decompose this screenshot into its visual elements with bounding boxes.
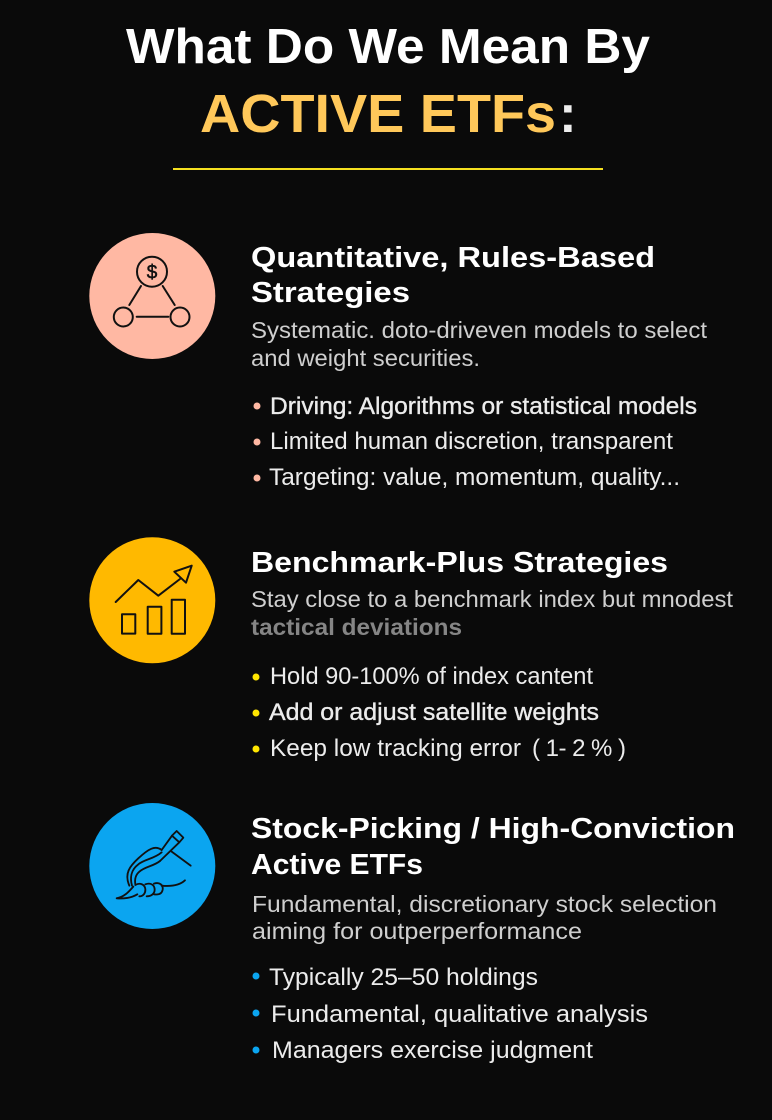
description: aiming for outperperformance: [252, 918, 582, 944]
bullet list: [252, 964, 648, 1064]
heading: [251, 813, 735, 881]
description: [252, 891, 717, 944]
bullet list: ( 1- 2 % ): [532, 735, 626, 762]
description: [251, 317, 708, 371]
description: Fundamental, discretionary stock selection: [252, 891, 717, 917]
description: Systematic. doto-driveven models to select: [251, 317, 708, 343]
bullet list: [254, 393, 697, 491]
heading: Quantitative, Rules-Based: [251, 242, 655, 274]
heading: Stock-Picking / High-Conviction: [251, 813, 735, 845]
title: What Do We Mean By: [126, 20, 650, 74]
heading: Active ETFs: [251, 849, 423, 881]
title: [126, 20, 650, 144]
heading: [251, 242, 655, 309]
bullet list: Hold 90-100% of index cantent: [270, 663, 593, 690]
heading: Benchmark-Plus Strategies: [251, 547, 668, 579]
panel: benchmark-plus strategies: [89, 537, 734, 762]
title: ACTIVE ETFs: [200, 84, 556, 144]
icon: network with dollar: $: [147, 262, 158, 284]
heading: Strategies: [251, 277, 410, 309]
bullet list: Limited human discretion, transparent: [270, 428, 673, 455]
bullet list: Driving: Algorithms or statistical models: [270, 393, 697, 420]
icon: growth chart: [89, 537, 215, 663]
bullet list: [252, 663, 626, 762]
description: and weight securities.: [251, 345, 480, 371]
bullet list: Add or adjust satellite weights: [269, 699, 599, 726]
bullet list: Managers exercise judgment: [272, 1037, 593, 1064]
description: [251, 586, 734, 640]
description: Stay close to a benchmark index but mnodest: [251, 586, 734, 612]
bullet list: Targeting: value, momentum, quality...: [269, 464, 680, 491]
description: tactical deviations: [251, 614, 462, 640]
title: :: [559, 85, 577, 144]
bullet list: Keep low tracking error: [270, 735, 521, 762]
bullet list: Typically 25–50 holdings: [269, 964, 538, 991]
bullet list: Fundamental, qualitative analysis: [271, 1001, 648, 1028]
icon: hand with pencil: [89, 803, 215, 929]
panel: stock-picking strategies: [89, 803, 735, 1064]
icon: network with dollar: [89, 233, 215, 359]
panel: quantitative strategies: [89, 233, 708, 491]
